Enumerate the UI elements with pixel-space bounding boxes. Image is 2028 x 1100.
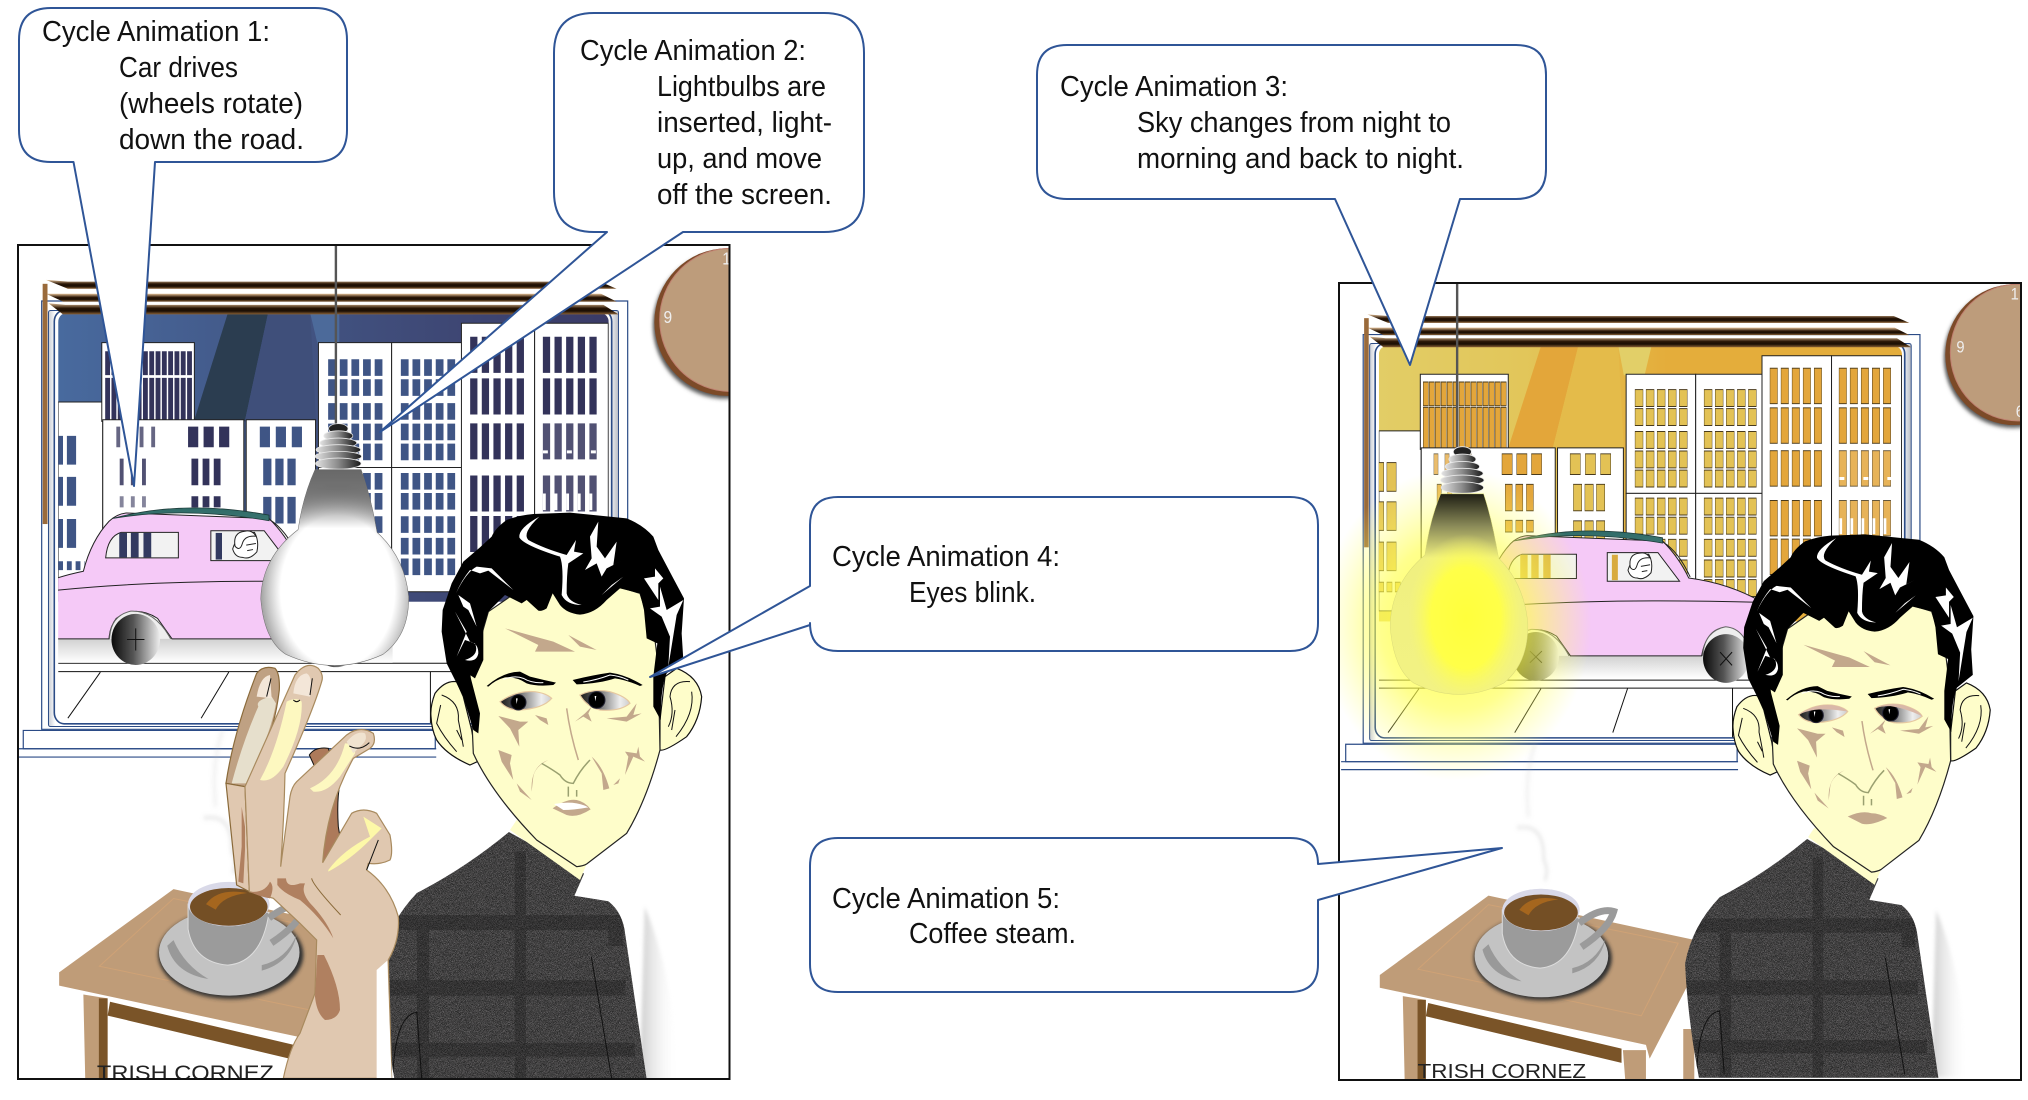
callout: cycle animation 1: (wheels rotate) (119, 88, 303, 120)
night window view (29, 313, 609, 724)
callout: cycle animation 3 (1037, 45, 1546, 365)
callout: cycle animation 5: Cycle Animation 5: (832, 883, 1060, 915)
callout: cycle animation 2: up, and move (657, 143, 822, 175)
callout: cycle animation 5: Coffee steam. (909, 918, 1076, 950)
callout: cycle animation 2: off the screen. (657, 179, 832, 211)
callout: cycle animation 5 (810, 838, 1502, 992)
window blinds (43, 280, 618, 524)
wall clock (650, 248, 728, 402)
callout: cycle animation 3: Sky changes from night to (1137, 107, 1451, 139)
signature right: TRISH CORNEZ (1418, 1060, 1586, 1082)
left panel border (18, 245, 730, 1079)
window blinds (1364, 314, 1911, 547)
panel: right comic frame at day (1319, 283, 2028, 1082)
window frame and sill (1341, 335, 1920, 770)
coffee steam (204, 729, 235, 874)
wall clock: 9 (1956, 339, 1965, 357)
callout: cycle animation 2 (380, 13, 864, 432)
lightbulb unlit (261, 424, 409, 666)
window frame and sill (18, 301, 628, 757)
hanging cord (1456, 283, 1458, 449)
callout: cycle animation 3: Cycle Animation 3: (1060, 71, 1288, 103)
panel: left comic frame at night (18, 245, 801, 1085)
callout: cycle animation 2: inserted, light- (657, 107, 832, 139)
callout: cycle animation 4 (650, 497, 1318, 677)
signature left: TRISH CORNEZ (97, 1062, 274, 1085)
table with coffee cup (1380, 889, 1694, 1080)
wall clock: 1 (722, 248, 731, 269)
callout: cycle animation 1: Car drives (119, 52, 238, 84)
callout: cycle animation 2: Lightbulbs are (657, 71, 826, 103)
callout: cycle animation 1 (19, 8, 347, 486)
man (380, 513, 702, 1082)
lidded eyes and mouth right man (1799, 704, 1922, 824)
callout: cycle animation 1: down the road. (119, 124, 304, 156)
callout: cycle animation 2: Cycle Animation 2: (580, 35, 806, 67)
hanging cord (335, 245, 337, 430)
wall clock: 9 (664, 307, 672, 327)
callout: cycle animation 4: Cycle Animation 4: (832, 541, 1060, 573)
wall clock: 6 (2016, 403, 2024, 421)
mouth left man (553, 800, 591, 816)
hand (226, 665, 399, 1078)
table with coffee cup (59, 882, 316, 1078)
light glow (1340, 476, 1586, 774)
callout: cycle animation 1: Cycle Animation 1: (42, 16, 270, 48)
wall clock (1944, 284, 2028, 428)
callout: cycle animation 4: Eyes blink. (909, 577, 1036, 609)
wall clock: 1 (2011, 286, 2019, 304)
day window view (1379, 346, 1902, 738)
right panel border (1339, 283, 2021, 1080)
callout: cycle animation 3: morning and back to night. (1137, 143, 1464, 175)
man (1685, 534, 1990, 1078)
coffee steam (1517, 743, 1547, 881)
lightbulb lit (1390, 447, 1528, 694)
